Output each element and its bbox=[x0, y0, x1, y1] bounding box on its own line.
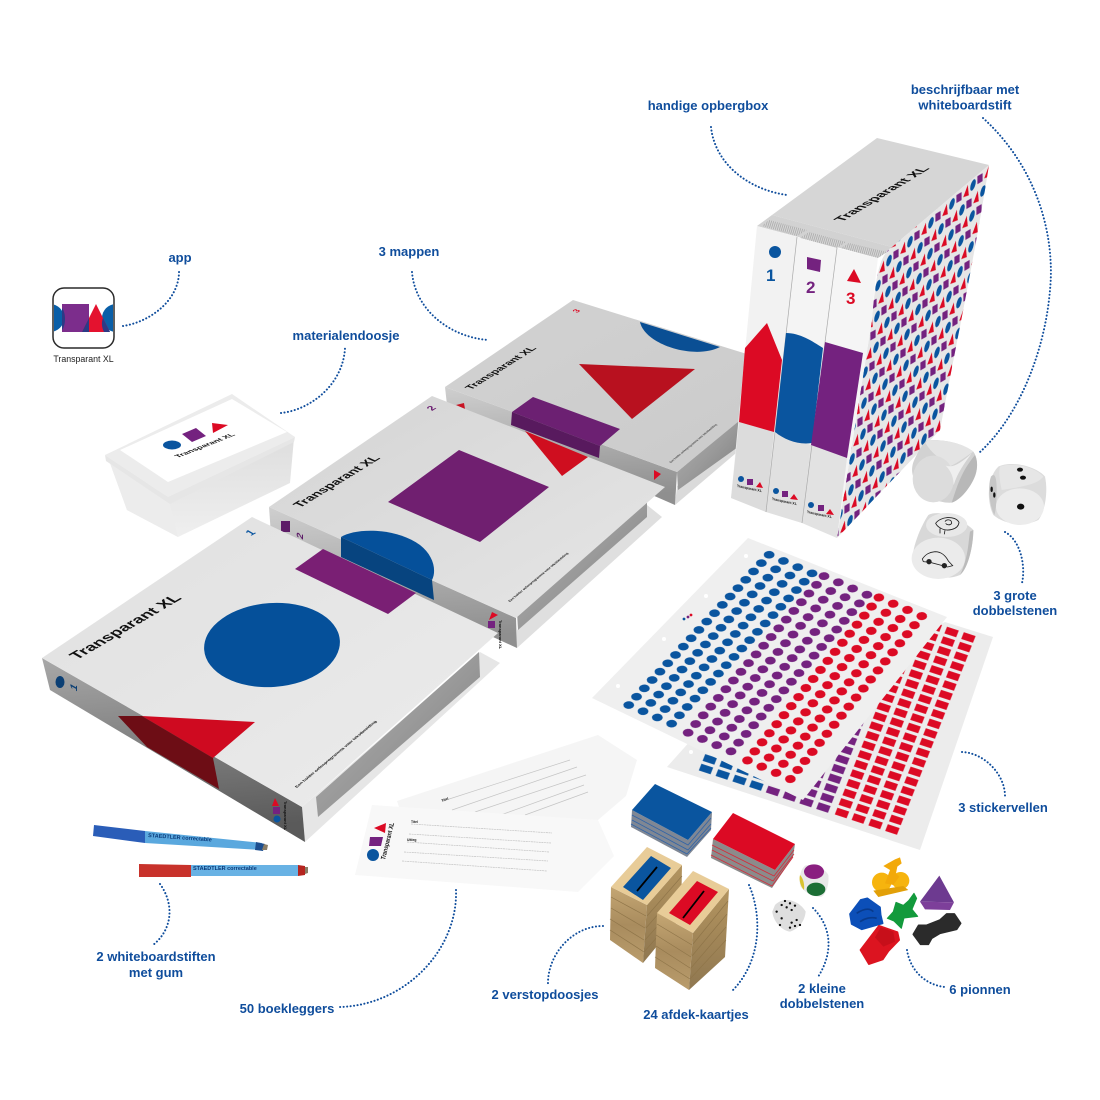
pion: vliegtuig bbox=[887, 893, 918, 928]
rode afdekkaartjes bbox=[711, 813, 795, 888]
kleurdobbelsteen bbox=[800, 864, 829, 897]
dobbelsteen blanco bbox=[912, 440, 977, 503]
app icon bbox=[52, 287, 115, 364]
stickervel achter bbox=[667, 591, 993, 850]
materialendoosje: Transparant XL bbox=[174, 432, 238, 459]
opbergbox: Transparant XL bbox=[737, 484, 763, 493]
label: 24 afdek-kaartjes: 24 afdek-kaartjes bbox=[643, 1007, 749, 1022]
label: 3 grote dobbelstenen: dobbelstenen bbox=[973, 603, 1057, 618]
map 2 bbox=[269, 396, 665, 650]
opbergbox: Transparant XL bbox=[772, 497, 798, 506]
opbergbox: 3 bbox=[846, 289, 855, 308]
label: 2 whiteboardstiften met gum: 2 whiteboardstiften bbox=[96, 949, 216, 964]
label: handige opbergbox: handige opbergbox bbox=[648, 98, 769, 113]
map 3: Een holder oefenprogramma voor tekstbeelding bbox=[668, 423, 718, 463]
label: 50 boekleggers: 50 boekleggers bbox=[240, 1001, 334, 1016]
stift blauw: STAEDTLER correctable bbox=[148, 833, 212, 843]
pion: blauwe figuur bbox=[850, 898, 883, 929]
map 1: Transparant XL bbox=[283, 801, 288, 831]
label: materialendoosje: materialendoosje bbox=[293, 328, 399, 343]
map 3: 3 bbox=[570, 308, 583, 314]
voorste boeklegger bbox=[355, 805, 614, 892]
label: beschrijfbaar met whiteboardstift: whiteboardstift bbox=[917, 98, 1012, 112]
label: 3 mappen: 3 mappen bbox=[379, 244, 439, 259]
dotted leader lines bbox=[123, 118, 1051, 1007]
dobbelsteen met plaatjes bbox=[912, 513, 973, 579]
stift blauw bbox=[93, 825, 268, 851]
verstopdoosje blauw bbox=[610, 847, 682, 963]
pion: zeilboot bbox=[920, 876, 954, 910]
app icon: Transparant XL bbox=[53, 354, 114, 364]
witte dobbelsteen bbox=[772, 900, 806, 932]
boekleggers: Titel bbox=[411, 820, 418, 824]
map 1: Een holder oefenprogramma voor tekstbeelding bbox=[293, 719, 378, 788]
stickervel voor bbox=[592, 538, 947, 800]
map 2: 2 bbox=[425, 405, 440, 412]
pion: raceauto bbox=[913, 914, 961, 944]
map 3: Transparant XL bbox=[463, 345, 540, 391]
opbergbox: Transparant XL bbox=[807, 510, 833, 519]
boekleggers: Transparant XL bbox=[380, 822, 396, 860]
label: 2 kleine dobbelstenen: dobbelstenen bbox=[780, 996, 864, 1011]
opbergbox bbox=[731, 138, 989, 538]
label: 2 whiteboardstiften met gum: met gum bbox=[129, 965, 183, 980]
blauwe afdekkaartjes bbox=[631, 784, 712, 857]
map 2: Transparant XL bbox=[498, 620, 503, 650]
label: 2 kleine dobbelstenen: 2 kleine bbox=[798, 981, 846, 996]
pion: rode auto bbox=[861, 926, 899, 964]
label: 6 pionnen: 6 pionnen bbox=[949, 982, 1011, 997]
label: app: app bbox=[168, 250, 192, 265]
boekleggers: Uitleg bbox=[407, 838, 416, 842]
boekleggers: Titel bbox=[441, 797, 449, 803]
map 1 bbox=[42, 517, 500, 842]
dobbelsteen met ogen bbox=[989, 464, 1046, 525]
pion: fietser bbox=[872, 857, 909, 897]
opbergbox: 2 bbox=[806, 278, 815, 297]
opbergbox: Transparant XL bbox=[830, 165, 933, 223]
label: beschrijfbaar met whiteboardstift: beschrijfbaar met bbox=[911, 82, 1019, 97]
map 1: 1 bbox=[243, 528, 259, 537]
label: 3 stickervellen: 3 stickervellen bbox=[958, 800, 1048, 815]
verstopdoosje rood bbox=[655, 871, 729, 990]
boekleggers bbox=[355, 735, 637, 892]
map 3 bbox=[445, 300, 750, 505]
stift rood: STAEDTLER correctable bbox=[193, 866, 257, 872]
map 2: Een holder oefenprogramma voor tekstbeelding bbox=[507, 552, 569, 602]
map 2: 2 bbox=[296, 531, 306, 541]
map 1: Transparant XL bbox=[66, 592, 186, 662]
map 2: Transparant XL bbox=[290, 454, 384, 509]
map 1: 1 bbox=[69, 681, 80, 693]
materialendoosje bbox=[105, 394, 295, 537]
stift rood bbox=[139, 864, 308, 877]
label: 3 grote dobbelstenen: 3 grote bbox=[993, 588, 1037, 603]
opbergbox: 1 bbox=[766, 266, 775, 285]
label: 2 verstopdoosjes: 2 verstopdoosjes bbox=[492, 987, 598, 1002]
